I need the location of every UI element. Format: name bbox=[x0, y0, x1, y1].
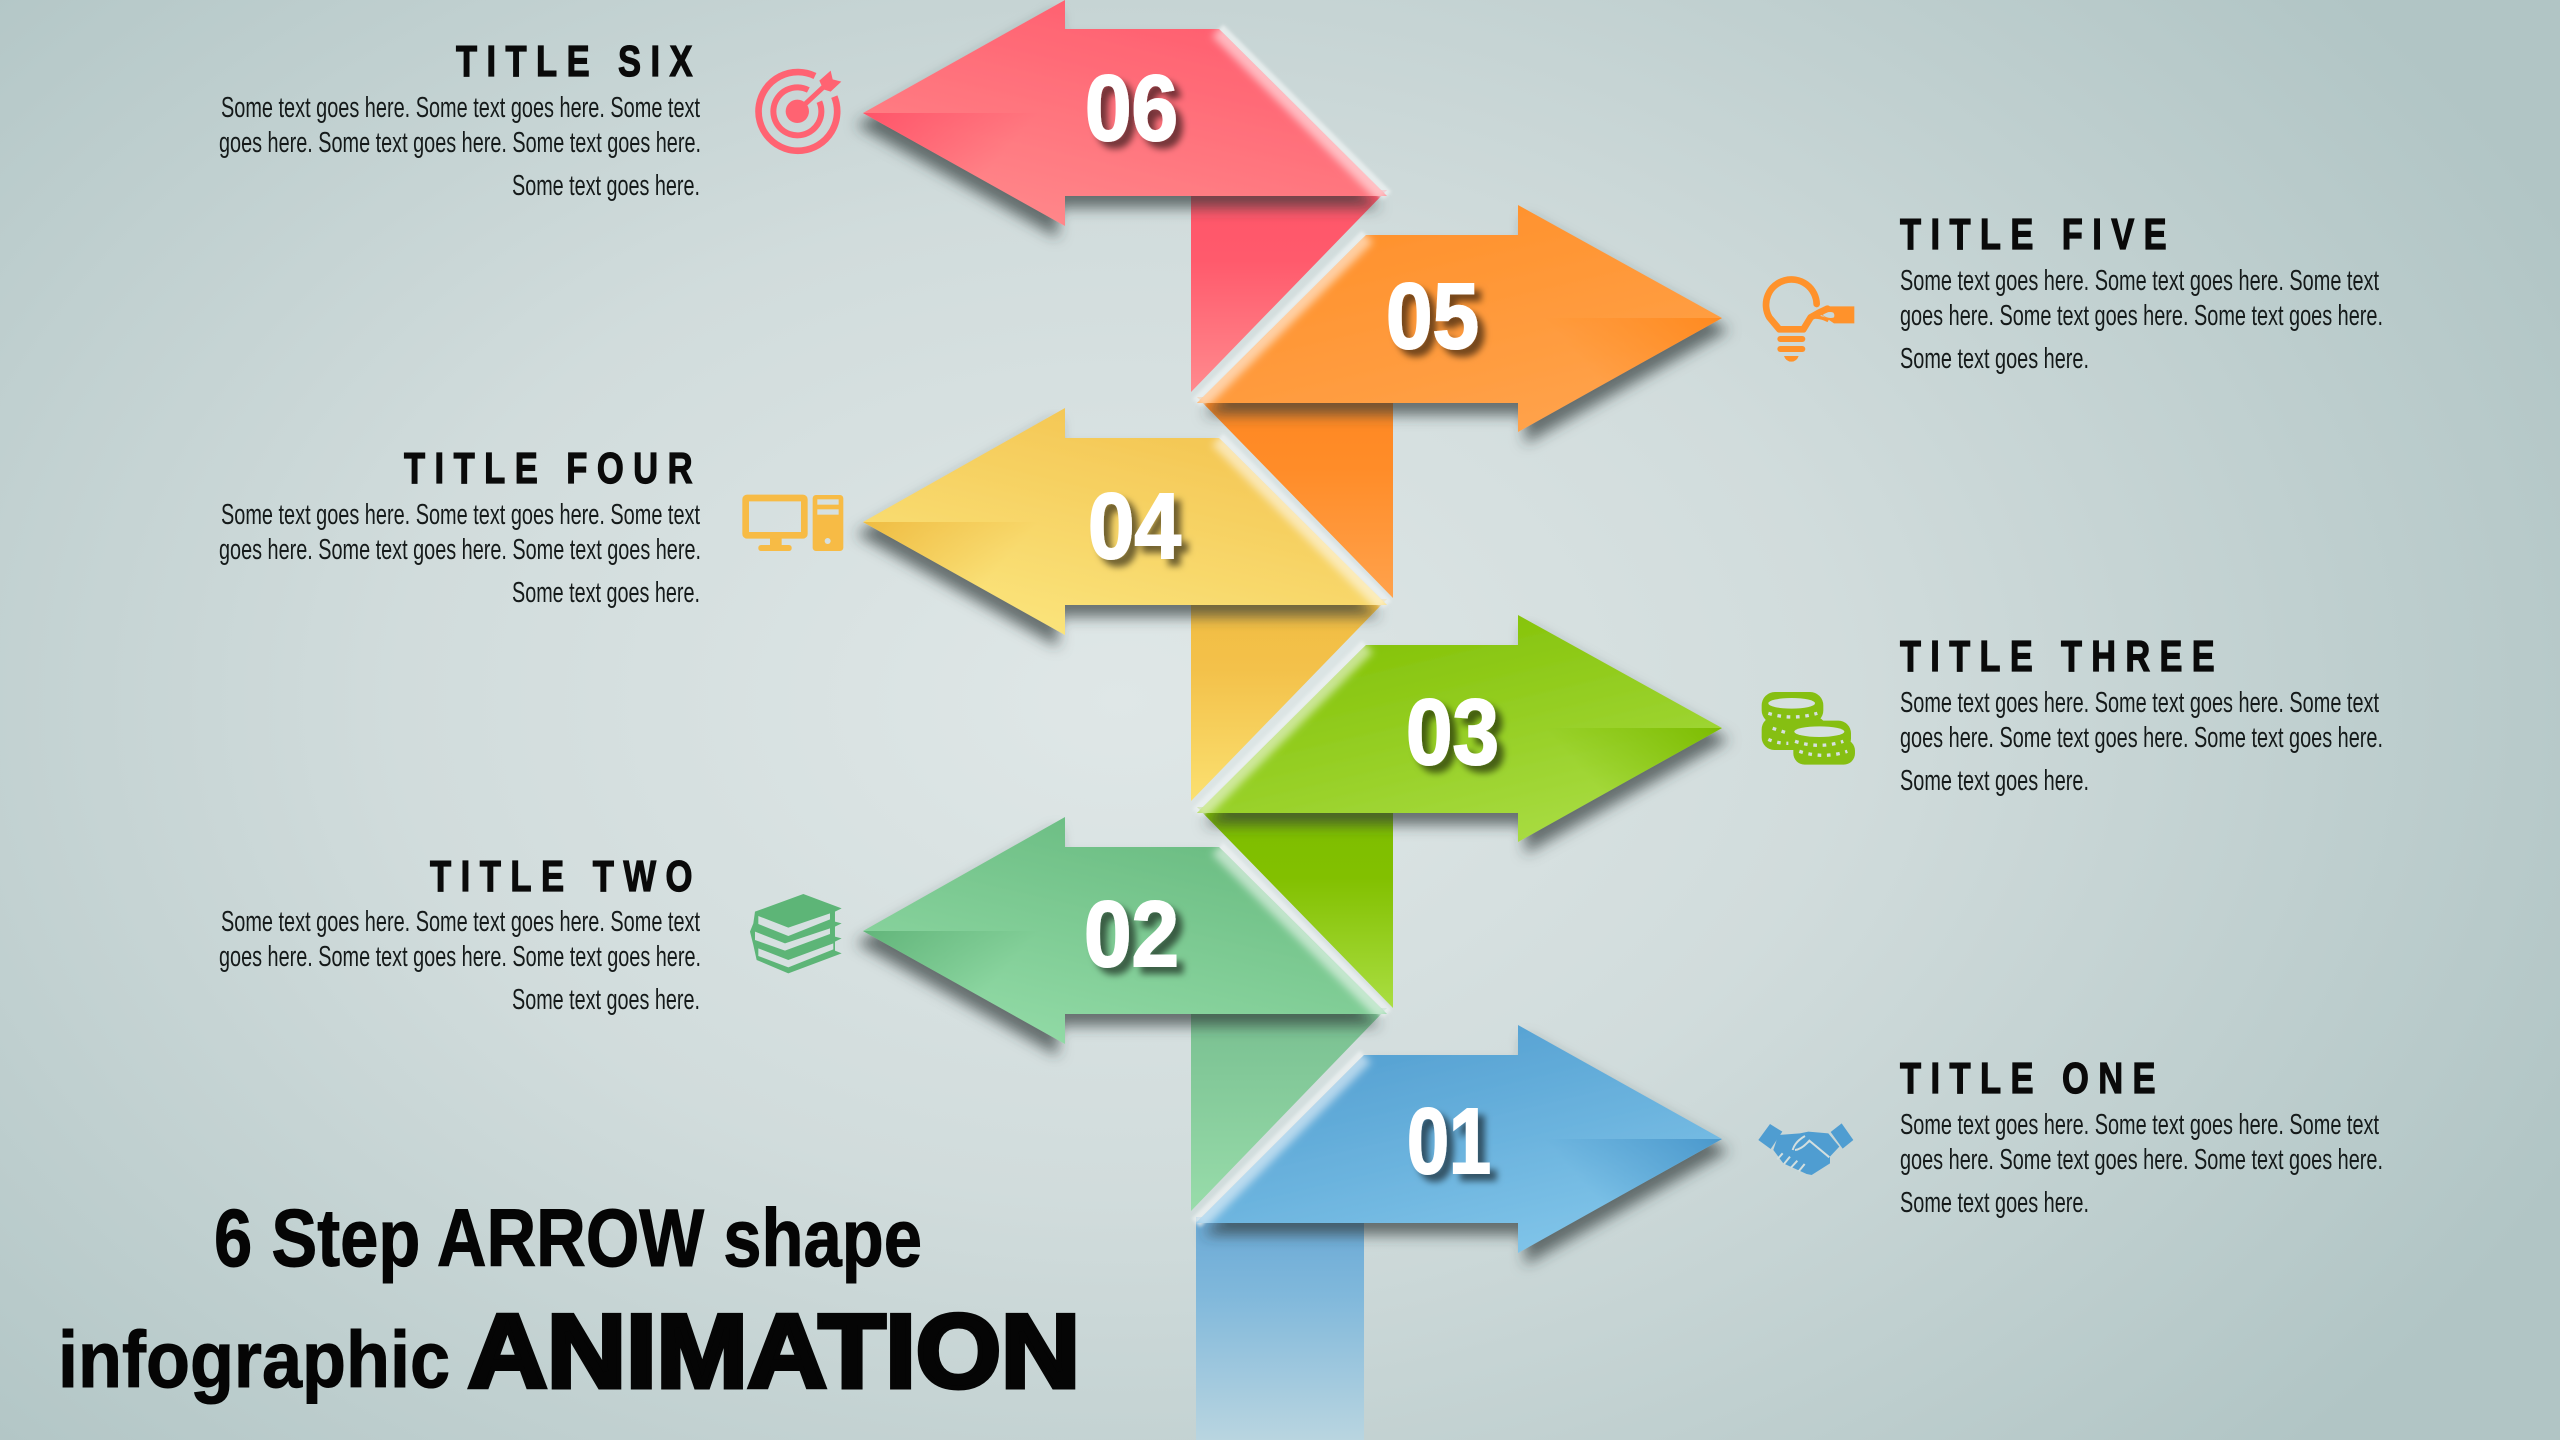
folded strip 01 bbox=[1196, 1217, 1364, 1440]
arrow step 05 bbox=[1197, 205, 1722, 598]
body text bbox=[219, 499, 701, 609]
arrow step 06 bbox=[863, 0, 1387, 392]
icon: lightbulb with tag bbox=[1766, 279, 1854, 362]
body text bbox=[1900, 1109, 2383, 1219]
folded strip 04 bbox=[1191, 599, 1387, 801]
fold shading 03 bbox=[1518, 728, 1722, 842]
fold shading 02 bbox=[863, 931, 1065, 1044]
main title bbox=[58, 1193, 1080, 1410]
icon: computer bbox=[746, 495, 843, 551]
arrow shape 02 bbox=[863, 817, 1387, 1044]
body text: Some text goes here. Some text goes here. Some text bbox=[221, 499, 700, 531]
arrow step 02 bbox=[863, 817, 1387, 1211]
number 03: 03 bbox=[1406, 680, 1499, 784]
body text bbox=[219, 92, 701, 202]
body text: Some text goes here. Some text goes here. Some text bbox=[221, 92, 700, 124]
text block: title six bbox=[219, 37, 702, 202]
heading: TITLE FIVE bbox=[1900, 210, 2176, 259]
number 04: 04 bbox=[1088, 474, 1181, 578]
folded strip 05 bbox=[1197, 397, 1393, 598]
number 01: 01 bbox=[1407, 1089, 1491, 1193]
body text bbox=[1900, 687, 2383, 797]
arrow shape 03 bbox=[1197, 615, 1722, 842]
icon: handshake bbox=[1758, 1123, 1853, 1175]
body text: Some text goes here. bbox=[1900, 343, 2089, 375]
body text: Some text goes here. bbox=[512, 577, 700, 609]
body text bbox=[219, 906, 701, 1016]
arrow step 01 bbox=[1196, 1025, 1722, 1440]
heading: TITLE FOUR bbox=[404, 444, 702, 493]
icon: books bbox=[750, 894, 842, 973]
text block: title two bbox=[219, 852, 702, 1016]
folded strip 06 bbox=[1191, 190, 1387, 392]
body text: Some text goes here. bbox=[512, 984, 700, 1016]
heading: TITLE TWO bbox=[430, 852, 702, 901]
fold shading 05 bbox=[1518, 318, 1722, 432]
folded strip 02 bbox=[1191, 1008, 1387, 1211]
icon: coins bbox=[1762, 692, 1855, 765]
body text: goes here. Some text goes here. Some text goes here. bbox=[219, 127, 701, 159]
number 05: 05 bbox=[1386, 264, 1479, 368]
heading: TITLE SIX bbox=[456, 37, 702, 86]
arrow step 04 bbox=[863, 408, 1387, 801]
folded strip 03 bbox=[1197, 807, 1393, 1008]
fold shading 04 bbox=[863, 522, 1065, 635]
heading: TITLE THREE bbox=[1900, 632, 2224, 681]
text block: title three bbox=[1900, 632, 2383, 797]
title line 2: infographic bbox=[58, 1315, 450, 1404]
body text: Some text goes here. bbox=[1900, 765, 2089, 797]
body text bbox=[1900, 265, 2383, 375]
arrow shape 01 bbox=[1196, 1025, 1722, 1253]
fold shading 01 bbox=[1518, 1139, 1722, 1253]
text block: title four bbox=[219, 444, 702, 609]
title line 1: 6 Step ARROW shape bbox=[214, 1193, 922, 1284]
arrow shape 06 bbox=[863, 0, 1387, 226]
arrow shape 05 bbox=[1197, 205, 1722, 432]
text block: title one bbox=[1900, 1054, 2383, 1219]
body text: Some text goes here. bbox=[512, 170, 700, 202]
heading: TITLE ONE bbox=[1900, 1054, 2165, 1103]
fold shading 06 bbox=[863, 113, 1065, 226]
title word: animation: ANIMATION bbox=[468, 1294, 1080, 1410]
number 06: 06 bbox=[1085, 56, 1178, 160]
body text: goes here. Some text goes here. Some text goes here. bbox=[219, 534, 701, 566]
body text: Some text goes here. Some text goes here. Some text bbox=[221, 906, 700, 938]
number 02: 02 bbox=[1084, 882, 1179, 986]
icon: target bbox=[759, 71, 841, 151]
body text: Some text goes here. bbox=[1900, 1187, 2089, 1219]
text block: title five bbox=[1900, 210, 2383, 375]
arrow step 03 bbox=[1197, 615, 1722, 1008]
body text: goes here. Some text goes here. Some text goes here. bbox=[219, 941, 701, 973]
arrow shape 04 bbox=[863, 408, 1387, 635]
